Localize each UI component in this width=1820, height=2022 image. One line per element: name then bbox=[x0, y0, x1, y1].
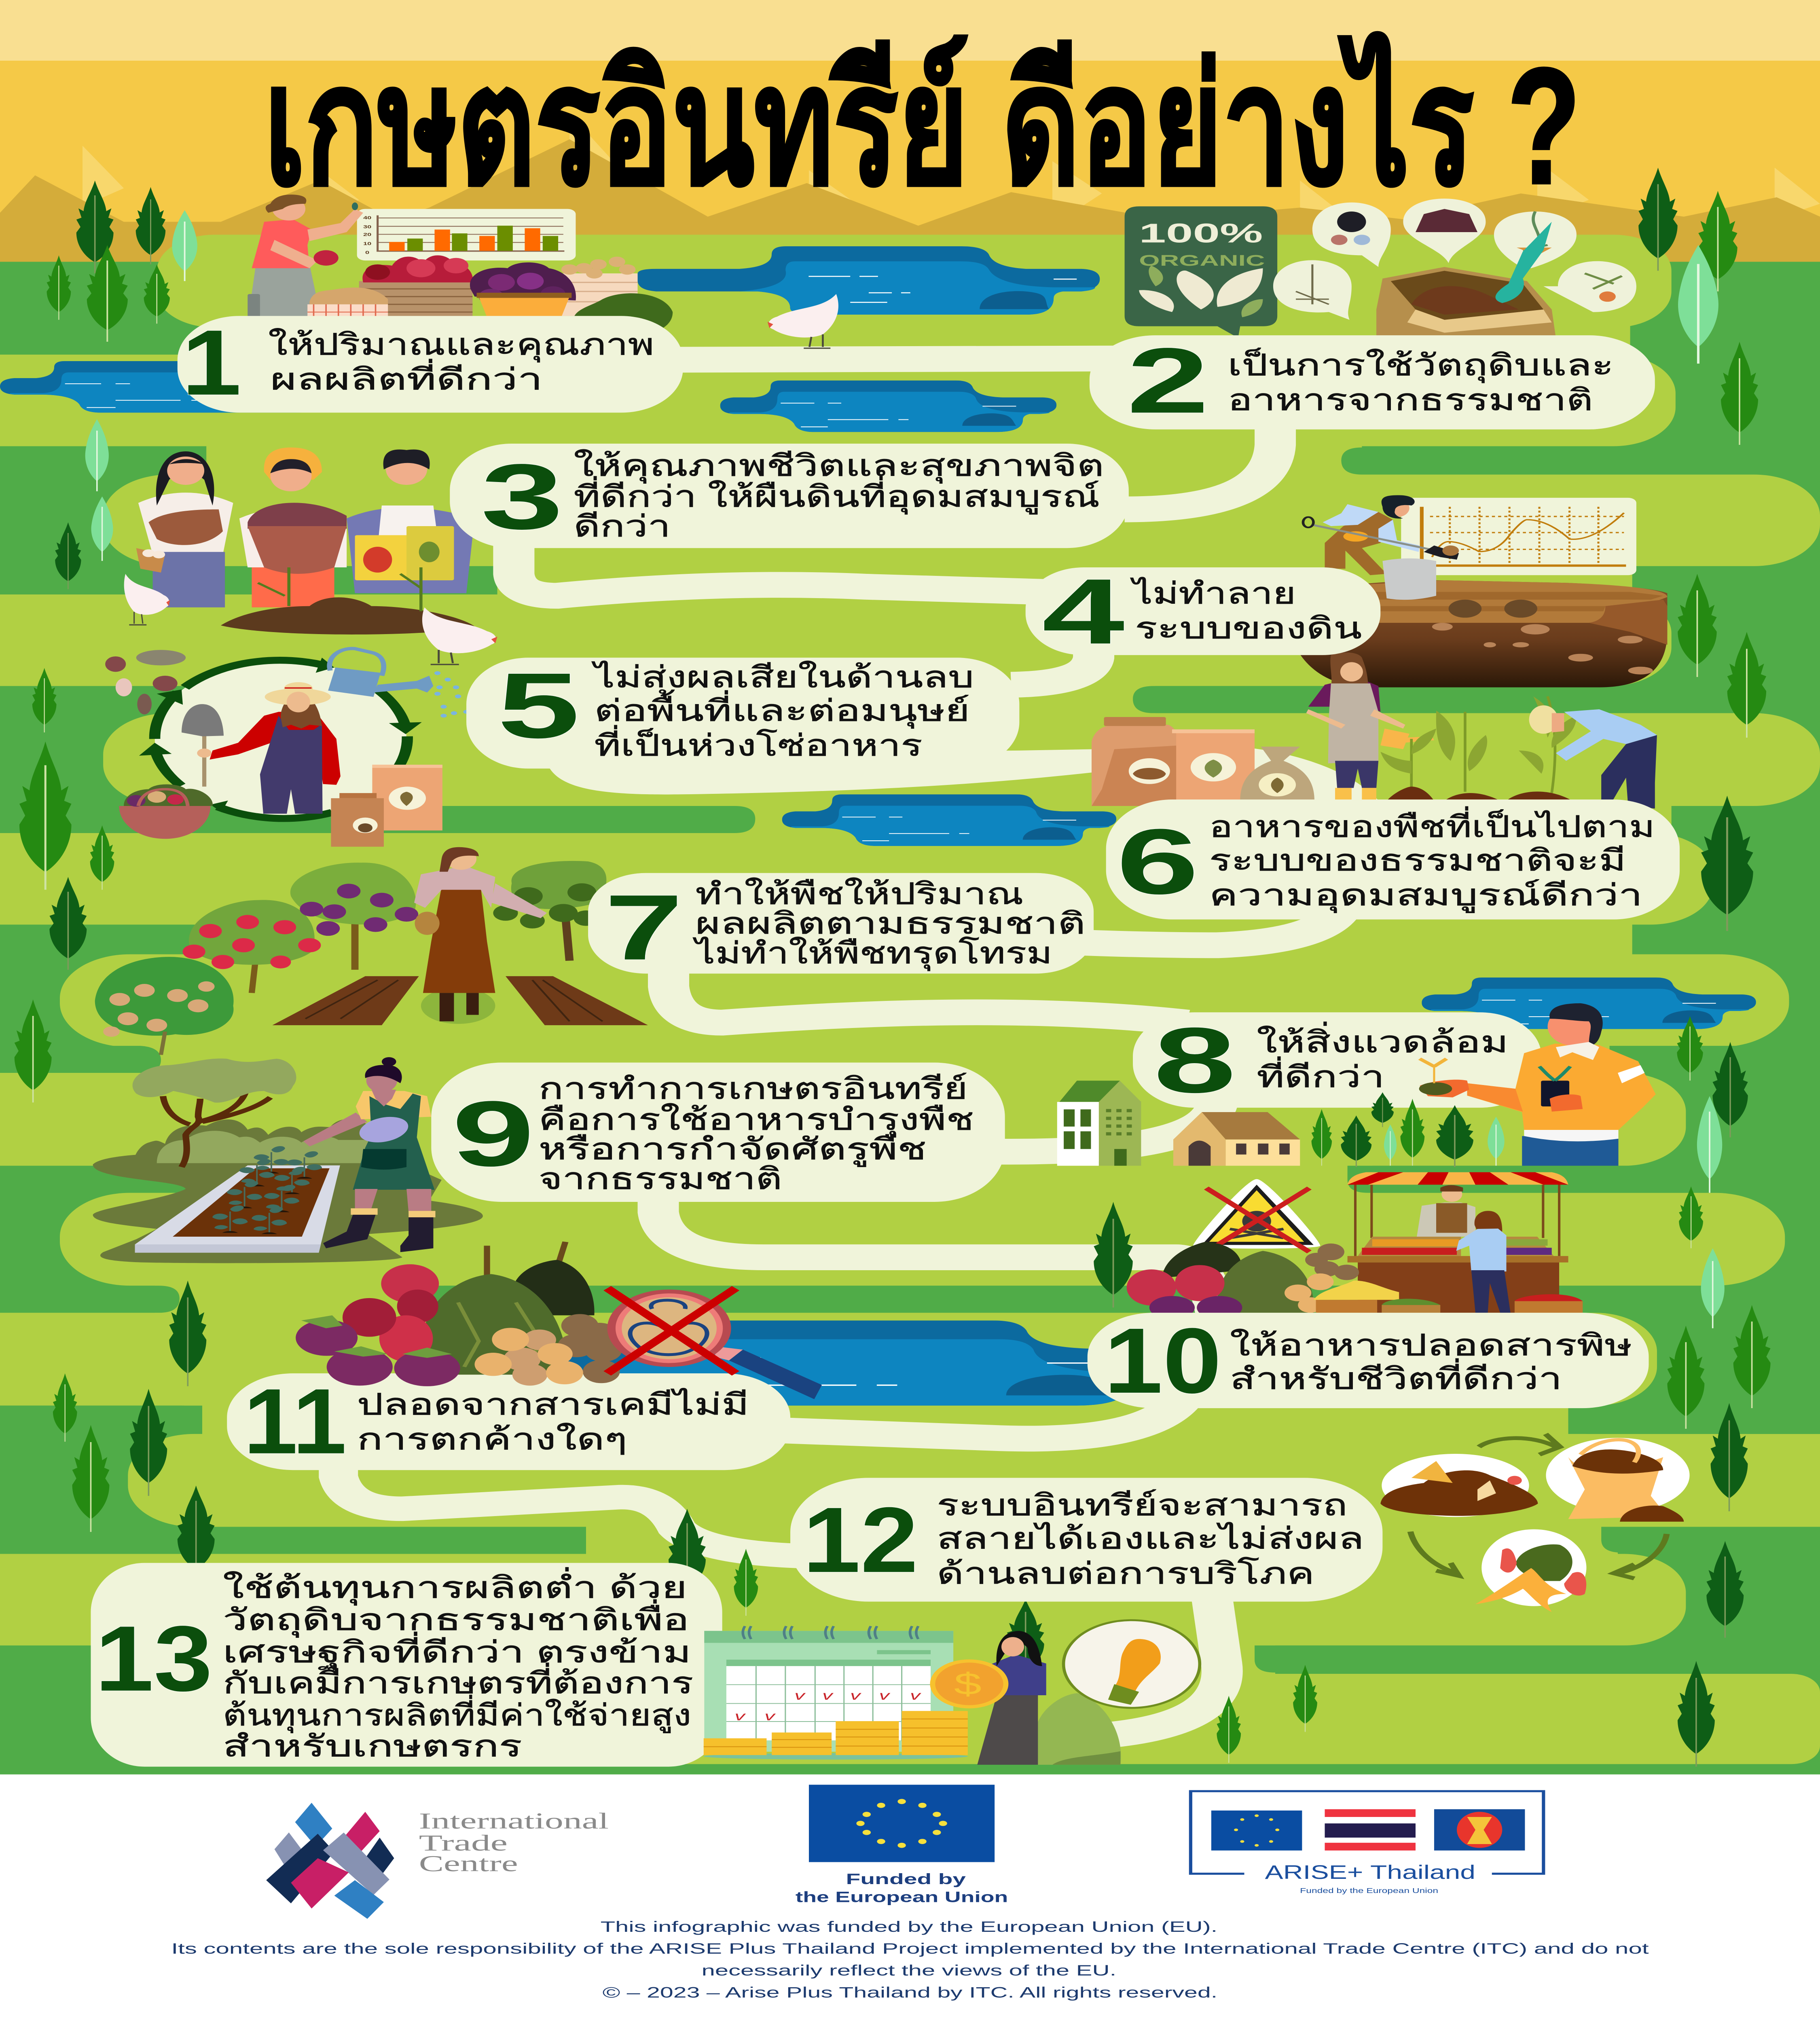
pill 11: ปลอดจากสารเคมีไม่มี bbox=[357, 1387, 749, 1421]
pine trees bbox=[15, 168, 1771, 1767]
logo: International Trade Centre: International bbox=[419, 1809, 609, 1834]
pill 7 bbox=[588, 873, 1094, 979]
logo: EU flag funded by: Funded by bbox=[846, 1871, 966, 1887]
pill 13: เศรษฐกิจที่ดีกว่า ตรงข้าม bbox=[223, 1632, 691, 1670]
pill 9 bbox=[431, 1063, 1005, 1202]
pill 5: ต่อพื้นที่และต่อมนุษย์ bbox=[594, 690, 970, 729]
pill 12: ระบบอินทรีย์จะสามารถ bbox=[937, 1488, 1348, 1522]
pill 13: สำหรับเกษตรกร bbox=[223, 1729, 522, 1763]
pill 12: ด้านลบต่อการบริโภค bbox=[937, 1557, 1314, 1590]
pill 10: ให้อาหารปลอดสารพิษ bbox=[1230, 1328, 1632, 1362]
illustration: calendar, coins and woman with idea bbox=[704, 1620, 1200, 1765]
pill 3: ที่ดีกว่า ให้ผืนดินที่อุดมสมบูรณ์ bbox=[574, 476, 1100, 515]
pill 2 bbox=[1090, 329, 1655, 432]
illustration: calendar, coins and woman with idea: v bbox=[879, 1688, 891, 1703]
illustration: calendar, coins and woman with idea: v bbox=[822, 1688, 834, 1703]
pill 1: ให้ปริมาณและคุณภาพ bbox=[268, 328, 654, 362]
footer panel bbox=[0, 1775, 1820, 2022]
pill 11: การตกค้างใดๆ bbox=[357, 1422, 627, 1456]
disclaimer text: Its contents are the sole responsibility of the ARISE Plus Thailand Project implemented by the International Trade Centre (ITC) and do not bbox=[171, 1941, 1649, 1957]
background sky and hills bbox=[0, 0, 1820, 267]
pill 1: 1 bbox=[182, 311, 241, 414]
pill 9: จากธรรมชาติ bbox=[539, 1162, 782, 1195]
illustration: calendar, coins and woman with idea: $ bbox=[954, 1667, 982, 1701]
pill 13: 13 bbox=[95, 1607, 213, 1710]
pill 2: อาหารจากธรรมชาติ bbox=[1228, 383, 1593, 417]
illustration: farmer with fruit and chart: 20 bbox=[363, 232, 371, 237]
pill 3: 3 bbox=[481, 445, 563, 548]
pill 12: สลายได้เองและไม่ส่งผล bbox=[937, 1522, 1364, 1555]
illustration: houses and small trees bbox=[1057, 1081, 1505, 1167]
logo: International Trade Centre: Centre bbox=[419, 1851, 518, 1876]
pill 10 bbox=[1088, 1309, 1649, 1413]
illustration: calendar, coins and woman with idea: v bbox=[794, 1688, 806, 1703]
logo: ARISE Plus Thailand: ARISE+ Thailand bbox=[1265, 1861, 1475, 1883]
pill 4: 4 bbox=[1042, 560, 1126, 663]
pill 5 bbox=[466, 654, 1019, 769]
pill 13: กับเคมีการเกษตรที่ต้องการ bbox=[223, 1662, 693, 1700]
bucket of soil bbox=[1382, 558, 1436, 600]
disclaimer text: necessarily reflect the views of the EU. bbox=[702, 1963, 1116, 1979]
logo: International Trade Centre bbox=[266, 1803, 609, 1919]
pill 9: 9 bbox=[452, 1082, 534, 1185]
pill 1 bbox=[178, 311, 683, 414]
illustration: farmer with fruit and chart: 10 bbox=[363, 241, 371, 246]
pill 12: 12 bbox=[803, 1488, 918, 1592]
pill 10: สำหรับชีวิตที่ดีกว่า bbox=[1230, 1358, 1562, 1395]
illustration: man measuring soil with chart bbox=[1298, 495, 1667, 687]
pill 13: ใช้ต้นทุนการผลิตต่ำ ด้วย bbox=[223, 1567, 687, 1605]
pill 8: ให้สิ่งแวดล้อม bbox=[1257, 1022, 1509, 1059]
illustration: gardeners with sacks and seedlings bbox=[1092, 652, 1657, 808]
illustration: farmer with fruit and chart bbox=[248, 195, 673, 333]
pill 6: อาหารของพืชที่เป็นไปตาม bbox=[1209, 806, 1655, 843]
pill 7: ผลผลิตตามธรรมชาติ bbox=[695, 907, 1086, 940]
illustration: calendar, coins and woman with idea: v bbox=[734, 1709, 746, 1723]
logo: International Trade Centre: Trade bbox=[419, 1831, 508, 1856]
pill 6: ระบบของธรรมชาติจะมี bbox=[1209, 844, 1626, 877]
pill 4 bbox=[1026, 560, 1380, 663]
pill 7: ไม่ทำให้พืชทรุดโทรม bbox=[692, 936, 1052, 971]
illustration: fruit pile bbox=[296, 1242, 622, 1386]
pill 3: ให้คุณภาพชีวิตและสุขภาพจิต bbox=[574, 449, 1104, 484]
pill 6: 6 bbox=[1116, 810, 1199, 914]
pill 5: 5 bbox=[497, 654, 580, 757]
pill 9: หรือการกำจัดศัตรูพืช bbox=[539, 1132, 927, 1167]
illustration: farmer with fruit and chart: 40 bbox=[363, 215, 371, 220]
pill 7: 7 bbox=[605, 876, 683, 979]
illustration: calendar, coins and woman with idea: v bbox=[850, 1688, 862, 1703]
logo: ARISE Plus Thailand bbox=[1191, 1791, 1543, 1895]
pill 7: ทำให้พืชให้ปริมาณ bbox=[695, 877, 1024, 910]
pill 6 bbox=[1106, 799, 1680, 920]
lakes bbox=[0, 246, 1756, 1406]
illustration: organic cycle with farmer bbox=[105, 649, 474, 847]
connecting road bbox=[339, 358, 1393, 1734]
pill 4: ระบบของดิน bbox=[1135, 611, 1362, 645]
pill 8: 8 bbox=[1153, 1008, 1236, 1112]
disclaimer text: This infographic was funded by the European Union (EU). bbox=[601, 1919, 1217, 1935]
illustration: walking chicken bbox=[768, 294, 838, 348]
pill 5: ไม่ส่งผลเสียในด้านลบ bbox=[591, 660, 974, 694]
pill 8: ที่ดีกว่า bbox=[1257, 1056, 1384, 1093]
pill 13: ต้นทุนการผลิตที่มีค่าใช้จ่ายสูง bbox=[223, 1695, 691, 1733]
pill 2: 2 bbox=[1127, 329, 1209, 432]
pill 9: คือการใช้อาหารบำรุงพืช bbox=[539, 1103, 974, 1138]
disclaimer text: © – 2023 – Arise Plus Thailand by ITC. All rights reserved. bbox=[603, 1984, 1217, 2001]
illustration: man in orange jacket bbox=[1419, 1003, 1656, 1166]
illustration: three farmers with compost bbox=[124, 448, 497, 664]
pill 12 bbox=[790, 1478, 1382, 1601]
illustration: calendar, coins and woman with idea: v bbox=[764, 1709, 776, 1723]
pill 9: การทำการเกษตรอินทรีย์ bbox=[539, 1072, 968, 1105]
illustration: farmer with fruit and chart: 0 bbox=[365, 250, 369, 255]
pill 10: 10 bbox=[1104, 1309, 1221, 1413]
pill 3 bbox=[450, 444, 1129, 548]
illustration: calendar, coins and woman with idea: v bbox=[910, 1688, 922, 1703]
illustration: gardener at raised bed bbox=[93, 1057, 483, 1263]
illustration: farmer with fruit and chart: 30 bbox=[363, 224, 371, 229]
illustration: organic badge and compost sack: 100% bbox=[1139, 218, 1263, 248]
pill 13 bbox=[91, 1563, 722, 1767]
pill 5: ที่เป็นห่วงโซ่อาหาร bbox=[594, 725, 923, 762]
logo: EU flag funded by bbox=[796, 1785, 1008, 1906]
pill 11: 11 bbox=[243, 1369, 347, 1473]
pill 8 bbox=[1133, 1008, 1541, 1112]
disclaimer text bbox=[171, 1919, 1649, 2001]
pill 2: เป็นการใช้วัตถุดิบและ bbox=[1228, 348, 1614, 383]
land bands bbox=[0, 235, 1820, 1776]
pill 3: ดีกว่า bbox=[574, 510, 671, 543]
pill 6: ความอุดมสมบูรณ์ดีกว่า bbox=[1209, 878, 1642, 913]
pill 11 bbox=[227, 1369, 790, 1473]
illustration: compost cycle bbox=[1380, 1434, 1690, 1612]
pill 13: วัตถุดิบจากธรรมชาติเพื่อ bbox=[223, 1599, 689, 1638]
illustration: orchard with woman and planting beds bbox=[95, 847, 648, 1055]
pill 4: ไม่ทำลาย bbox=[1130, 577, 1296, 610]
illustration: market stall and warning sign bbox=[1127, 1172, 1583, 1319]
illustration: magnifying glass with crossed chemicals bbox=[607, 1288, 822, 1399]
logo: ARISE Plus Thailand: Funded by the European Union bbox=[1300, 1887, 1438, 1895]
logo: EU flag funded by: the European Union bbox=[796, 1889, 1008, 1906]
illustration: organic badge and compost sack: ORGANIC bbox=[1139, 252, 1265, 269]
pill 1: ผลผลิตที่ดีกว่า bbox=[270, 359, 543, 396]
illustration: organic badge and compost sack bbox=[1125, 199, 1636, 338]
